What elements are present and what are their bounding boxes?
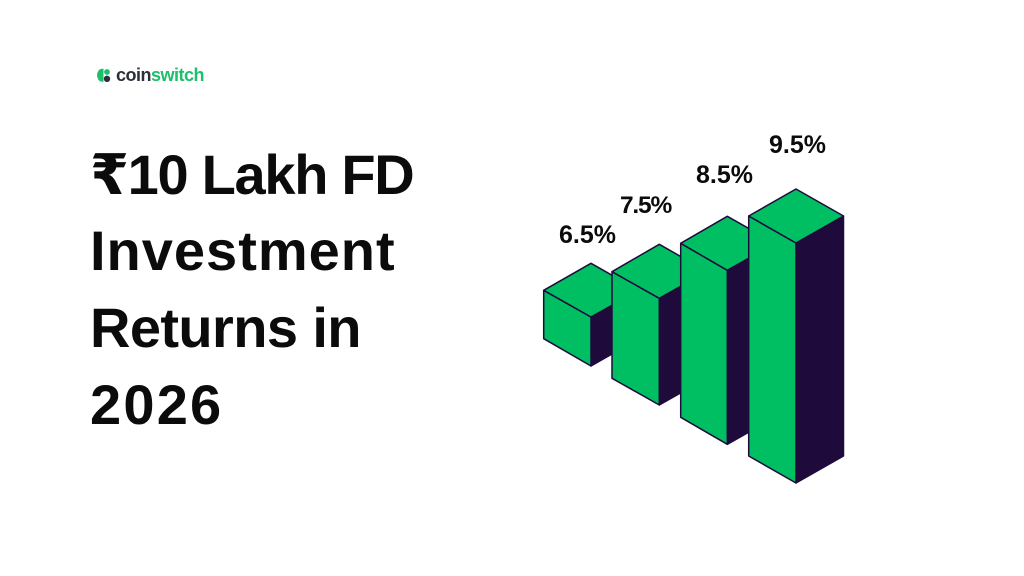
title: Investment: [90, 219, 396, 282]
label: 6.5%: 6.5%: [559, 221, 616, 249]
label: 9.5%: 9.5%: [769, 131, 826, 159]
title: [90, 143, 413, 436]
title: 2026: [90, 373, 223, 436]
wordmark: coinswitch: [116, 65, 204, 85]
logo: coinswitch: [97, 65, 204, 85]
bar: 8.5%: [681, 216, 775, 444]
bar: 9.5%: [749, 189, 844, 483]
label: 8.5%: 8.5%: [696, 161, 753, 189]
title: Returns in: [90, 296, 361, 359]
label: 7.5%: 7.5%: [620, 192, 672, 219]
title: ₹10 Lakh FD: [90, 143, 413, 206]
icon: coinswitch mark: [97, 68, 110, 82]
bar: 6.5%: [544, 263, 638, 366]
bar: 7.5%: [612, 244, 707, 405]
